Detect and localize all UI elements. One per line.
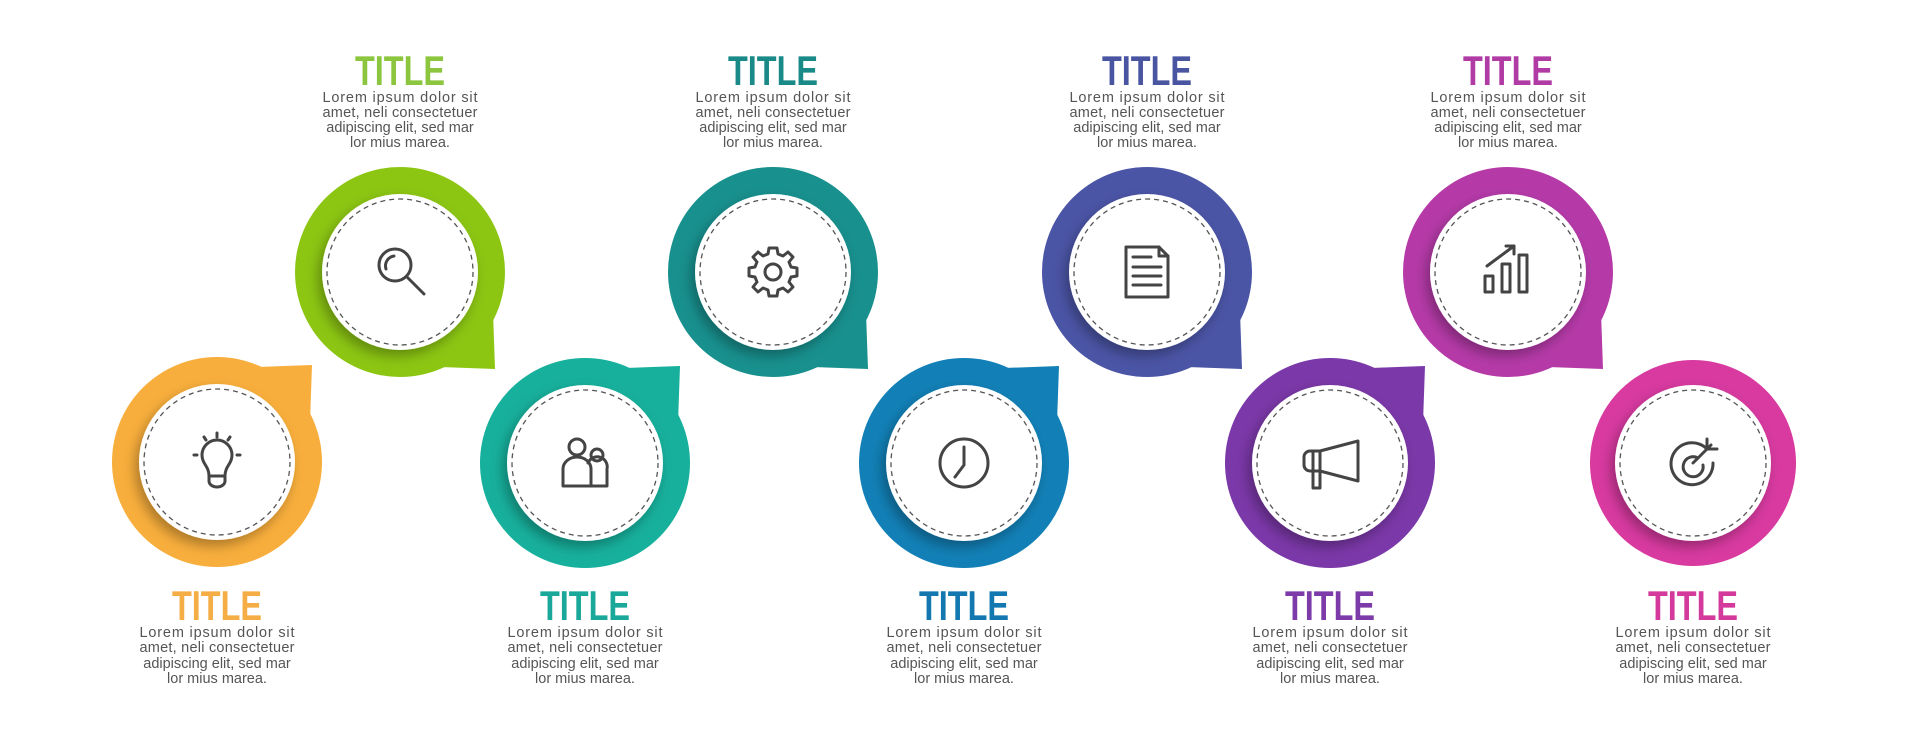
icon: target xyxy=(1671,439,1717,485)
title 9: TITLE xyxy=(1648,582,1738,629)
text 6: amet, neli consectetuer xyxy=(1070,105,1225,121)
icon: magnifier xyxy=(379,249,424,294)
text 7: Lorem ipsum dolor sit xyxy=(1252,625,1408,641)
text 4: adipiscing elit, sed mar xyxy=(699,120,847,136)
text 5: adipiscing elit, sed mar xyxy=(890,656,1038,672)
icon: gear xyxy=(749,248,797,296)
text 6: lor mius marea. xyxy=(1097,135,1197,151)
text 1 xyxy=(140,625,295,687)
text 8: adipiscing elit, sed mar xyxy=(1434,120,1582,136)
icon: document xyxy=(1126,247,1168,297)
text 6 xyxy=(1070,90,1225,151)
text 2 xyxy=(322,90,478,151)
step 6: indigo document xyxy=(1042,167,1252,377)
text 4: lor mius marea. xyxy=(723,135,823,151)
icon: clock xyxy=(940,439,988,487)
text 8: lor mius marea. xyxy=(1458,135,1558,151)
text 8 xyxy=(1430,90,1586,151)
text 3 xyxy=(508,625,663,687)
text 5: Lorem ipsum dolor sit xyxy=(886,625,1042,641)
title 5: TITLE xyxy=(919,582,1009,629)
text 1: adipiscing elit, sed mar xyxy=(143,656,291,672)
title 4: TITLE xyxy=(728,47,818,94)
text 6: Lorem ipsum dolor sit xyxy=(1070,90,1224,106)
text 8: Lorem ipsum dolor sit xyxy=(1430,90,1586,106)
step 2: green search xyxy=(295,167,505,377)
text 9: adipiscing elit, sed mar xyxy=(1619,656,1767,672)
text 1: lor mius marea. xyxy=(167,671,267,687)
text 6: adipiscing elit, sed mar xyxy=(1073,120,1221,136)
text 2: Lorem ipsum dolor sit xyxy=(322,90,478,106)
step 1: orange lightbulb xyxy=(112,357,322,567)
text 7: amet, neli consectetuer xyxy=(1252,640,1408,656)
title 1: TITLE xyxy=(172,582,262,629)
text 3: amet, neli consectetuer xyxy=(508,640,663,656)
title 8: TITLE xyxy=(1463,47,1553,94)
text 4: Lorem ipsum dolor sit xyxy=(696,90,850,106)
text 9: lor mius marea. xyxy=(1643,671,1743,687)
step 8: magenta chart xyxy=(1403,167,1613,377)
icon: megaphone xyxy=(1304,441,1358,488)
text 5 xyxy=(886,625,1042,687)
text 3: Lorem ipsum dolor sit xyxy=(508,625,662,641)
icon: lightbulb xyxy=(194,433,240,487)
icon: people xyxy=(563,439,607,486)
text 7: lor mius marea. xyxy=(1280,671,1380,687)
text 4 xyxy=(696,90,851,151)
text 1: Lorem ipsum dolor sit xyxy=(140,625,294,641)
step 7: purple megaphone xyxy=(1225,358,1435,568)
text 3: lor mius marea. xyxy=(535,671,635,687)
text 8: amet, neli consectetuer xyxy=(1430,105,1586,121)
title 7: TITLE xyxy=(1285,582,1375,629)
title 6: TITLE xyxy=(1102,47,1192,94)
step 3: teal-green people xyxy=(480,358,690,568)
step 9: pink target xyxy=(1590,360,1796,566)
title 3: TITLE xyxy=(540,582,630,629)
text 5: amet, neli consectetuer xyxy=(886,640,1042,656)
text 5: lor mius marea. xyxy=(914,671,1014,687)
text 4: amet, neli consectetuer xyxy=(696,105,851,121)
title 2: TITLE xyxy=(355,47,445,94)
step 4: teal gear xyxy=(668,167,878,377)
text 2: adipiscing elit, sed mar xyxy=(326,120,474,136)
text 1: amet, neli consectetuer xyxy=(140,640,295,656)
icon: bar chart xyxy=(1485,246,1527,292)
text 9: amet, neli consectetuer xyxy=(1616,640,1771,656)
text 2: amet, neli consectetuer xyxy=(322,105,478,121)
text 7: adipiscing elit, sed mar xyxy=(1256,656,1404,672)
step 5: blue clock xyxy=(859,358,1069,568)
text 9: Lorem ipsum dolor sit xyxy=(1616,625,1770,641)
text 7 xyxy=(1252,625,1408,687)
text 9 xyxy=(1616,625,1771,687)
text 2: lor mius marea. xyxy=(350,135,450,151)
text 3: adipiscing elit, sed mar xyxy=(511,656,659,672)
